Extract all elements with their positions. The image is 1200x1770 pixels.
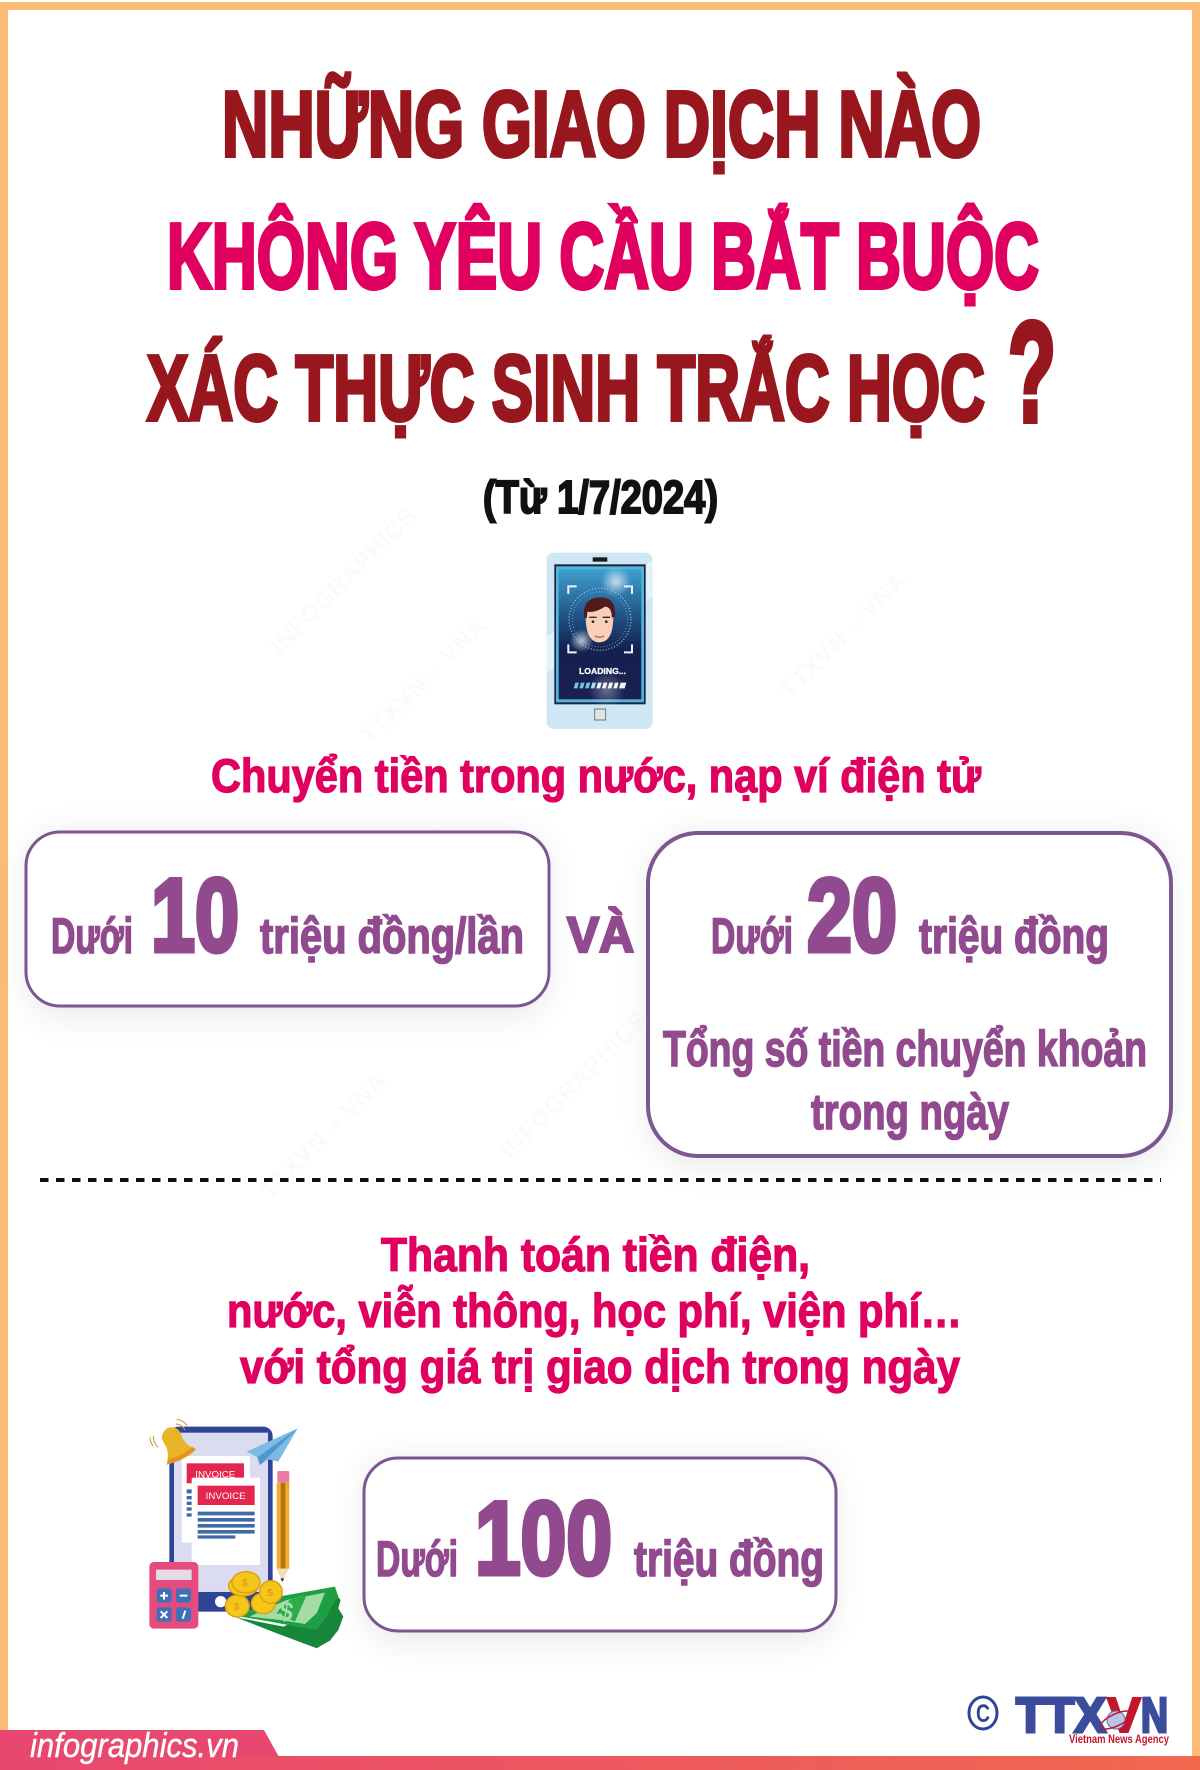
panel: under 10 million per transaction: Dưới xyxy=(51,908,133,964)
panel: under 20 million per day: 20 xyxy=(807,858,897,974)
logo: TTXVN: C xyxy=(976,1700,990,1728)
panel: under 100 million xyxy=(364,1458,836,1631)
panel: under 100 million: Dưới xyxy=(376,1531,458,1587)
logo: TTXVN xyxy=(969,1689,1169,1746)
icon: invoice on phone: $ xyxy=(276,1595,296,1627)
icon: invoice on phone: $ xyxy=(242,1578,248,1589)
icon: invoice on phone: $ xyxy=(234,1601,240,1611)
panel: under 20 million per day: trong ngày xyxy=(811,1084,1009,1140)
title xyxy=(147,72,1056,452)
date subtitle: (Từ 1/7/2024) xyxy=(483,471,718,523)
section heading: domestic transfer: Chuyển tiền trong nước, nạp ví điện tử xyxy=(211,749,982,802)
logo: TTXVN: N xyxy=(1141,1689,1168,1743)
logo: TTXVN: V xyxy=(1107,1689,1141,1743)
panel: under 100 million: 100 xyxy=(475,1481,612,1597)
watermarks xyxy=(255,502,912,1204)
logo: TTXVN: Vietnam News Agency xyxy=(1069,1734,1169,1746)
section heading: bill payments: nước, viễn thông, học phí, viện phí… xyxy=(227,1284,962,1337)
connector word: VÀ xyxy=(567,907,634,963)
progress bar xyxy=(574,683,626,688)
section heading: bill payments xyxy=(227,1228,962,1393)
panel: under 10 million per transaction: 10 xyxy=(151,858,239,974)
panel: under 20 million per day: Dưới xyxy=(711,908,793,964)
panel shadows xyxy=(25,831,1171,1644)
icon: phone face scan: LOADING... xyxy=(579,666,626,676)
icon: invoice on phone: INVOICE xyxy=(195,1469,235,1479)
icon: invoice on phone xyxy=(149,1419,343,1648)
panel: under 20 million per day xyxy=(648,833,1171,1156)
panel: under 20 million per day: triệu đồng xyxy=(919,908,1109,964)
footer site name: infographics.vn xyxy=(30,1727,239,1765)
icon: phone face scan xyxy=(547,553,653,729)
section heading: bill payments: với tổng giá trị giao dịch trong ngày xyxy=(240,1340,960,1393)
footer band xyxy=(0,1727,1200,1770)
icon: invoice on phone: INVOICE xyxy=(206,1491,246,1501)
section heading: bill payments: Thanh toán tiền điện, xyxy=(381,1228,810,1281)
panel: under 10 million per transaction: triệu đồng/lần xyxy=(260,908,524,964)
icon: invoice on phone: $ xyxy=(267,1588,273,1599)
panel: under 100 million: triệu đồng xyxy=(634,1531,824,1587)
title: ? xyxy=(1008,293,1056,452)
panel: under 10 million per transaction xyxy=(26,832,549,1006)
logo: TTXVN: TTX xyxy=(1016,1689,1106,1743)
